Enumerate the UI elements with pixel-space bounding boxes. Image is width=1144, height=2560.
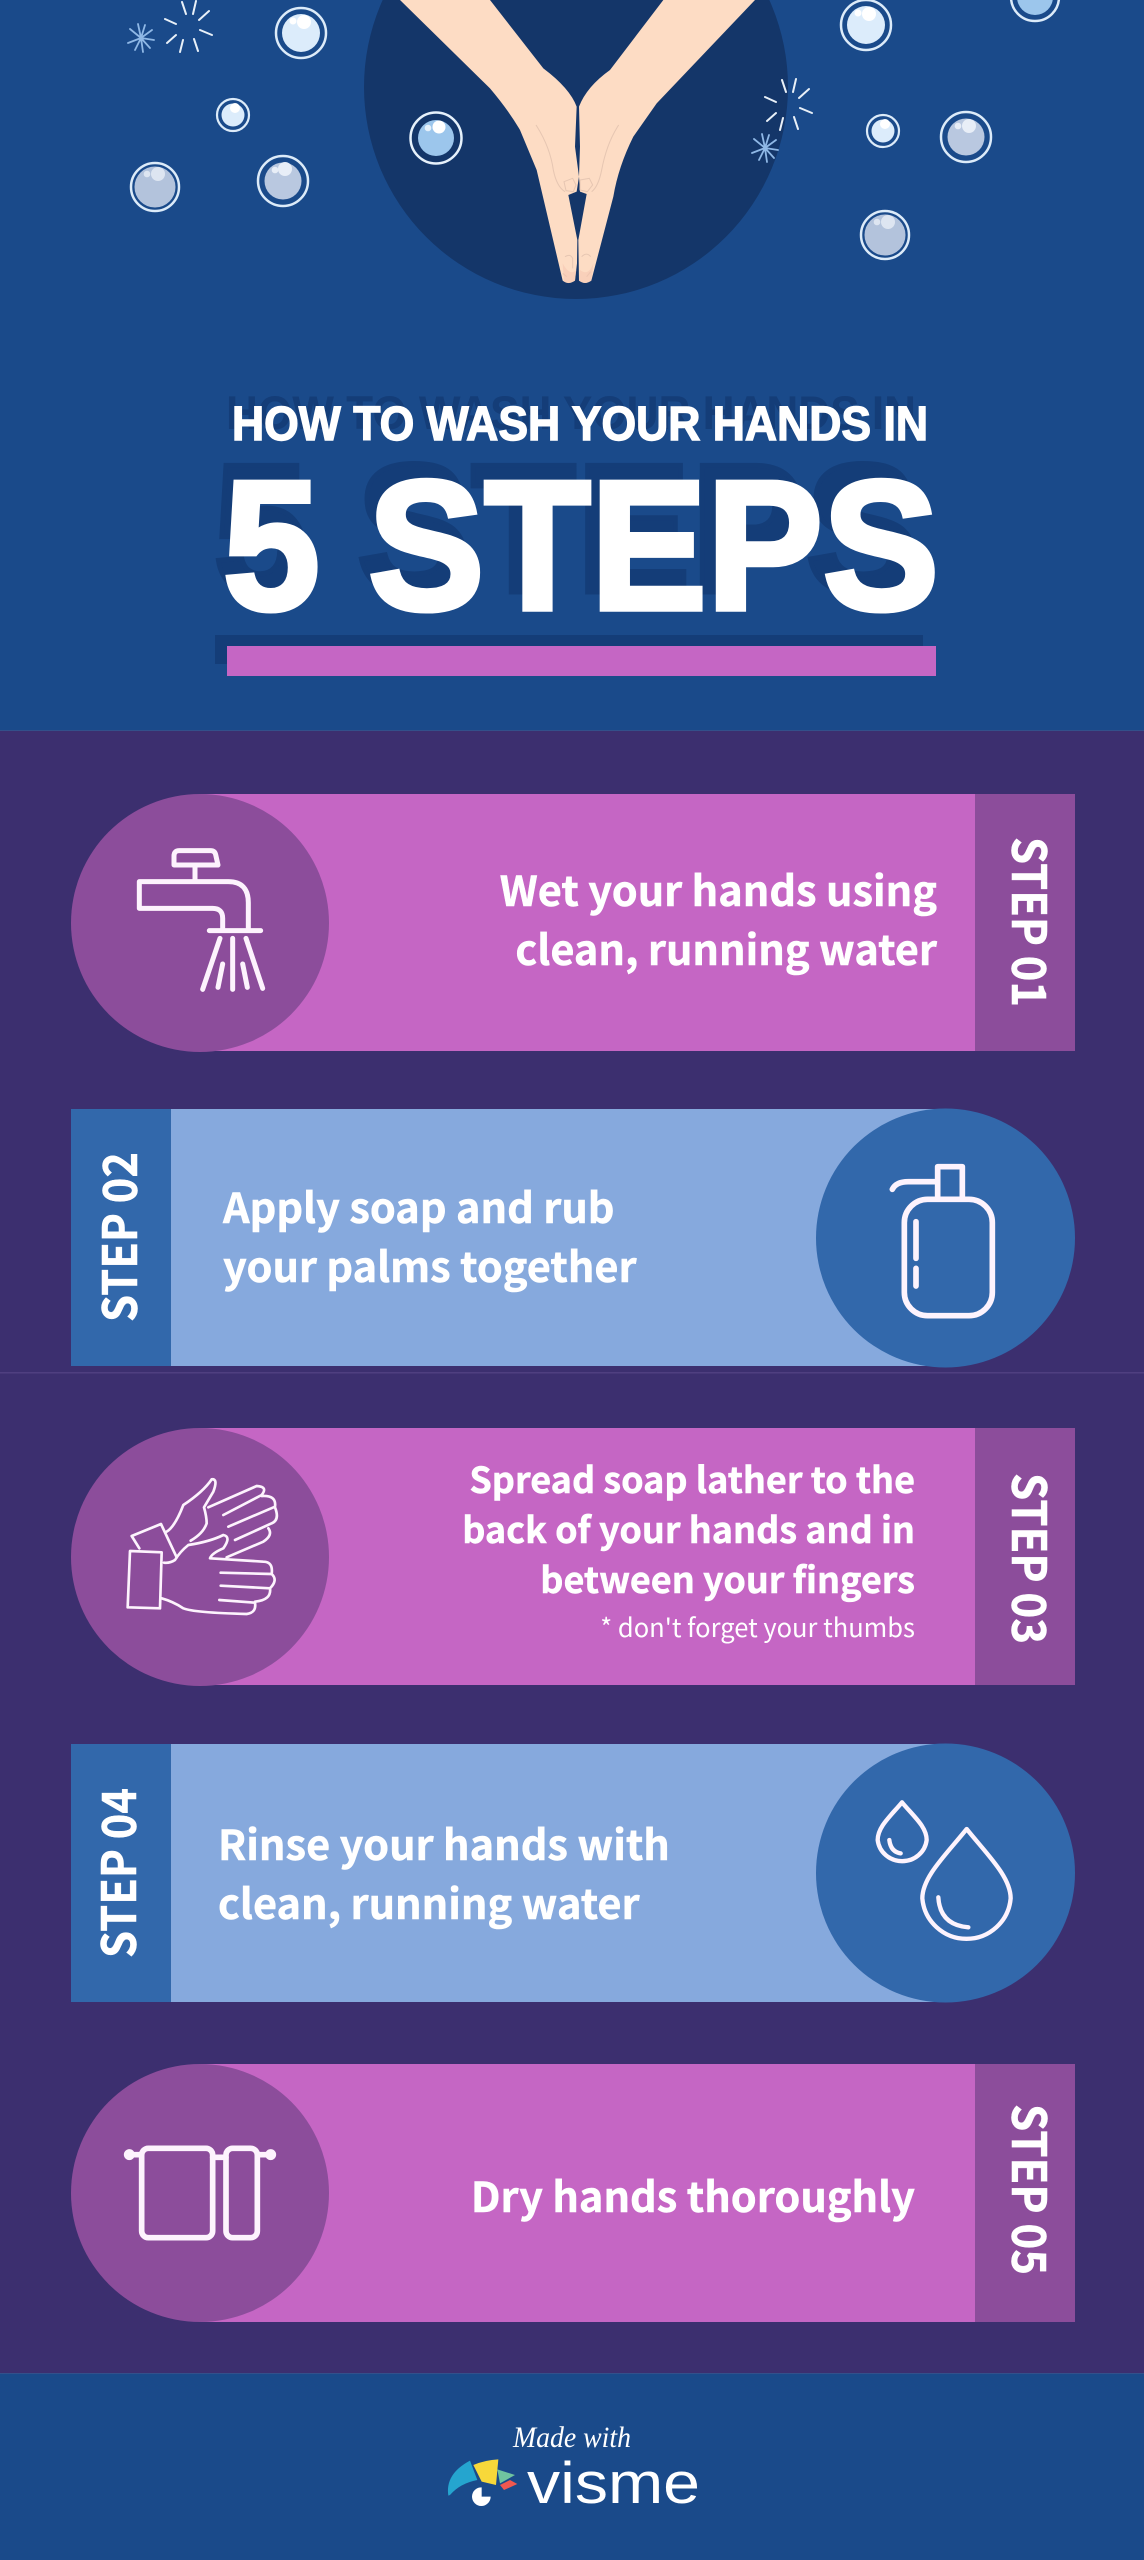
step 5: [71, 2064, 1075, 2322]
logo wordmark: visme: [527, 2451, 700, 2516]
icon: hands: [128, 1479, 277, 1614]
step 1 text: clean, running water: [515, 917, 938, 977]
step 5 text: Dry hands thoroughly: [471, 2164, 915, 2224]
step 2 text: Apply soap and rub: [222, 1175, 615, 1235]
step 4 label: STEP 04: [81, 1788, 150, 1958]
step 3 label: STEP 03: [998, 1473, 1067, 1644]
step 3 text: between your fingers: [540, 1552, 915, 1604]
made with caption: Made with: [512, 2421, 631, 2454]
step 4 text: clean, running water: [218, 1871, 641, 1931]
step 4: [71, 1744, 1075, 2002]
step 1 label: STEP 01: [998, 837, 1067, 1007]
step 1 text: Wet your hands using: [500, 858, 937, 918]
title underline: [227, 646, 936, 676]
title line 1: HOW TO WASH YOUR HANDS IN: [232, 398, 928, 451]
step 3 text: back of your hands and in: [462, 1502, 915, 1554]
step 4 text: Rinse your hands with: [218, 1812, 670, 1872]
dark circle behind hands: [364, 0, 788, 299]
step 2 text: your palms together: [223, 1234, 638, 1294]
steps panel background: [0, 730, 1144, 2373]
step 3 note: * don't forget your thumbs: [600, 1608, 915, 1645]
step 5 label: STEP 05: [998, 2104, 1067, 2275]
title: [213, 386, 939, 676]
step 3: [71, 1428, 1075, 1686]
sparkles: [128, 1, 812, 162]
step 2: [71, 1108, 1075, 1368]
soap bubbles: [131, 0, 1059, 259]
step 2 label: STEP 02: [82, 1152, 151, 1322]
header panel: [0, 0, 1144, 730]
footer: [0, 2373, 1144, 2560]
step 3 text: Spread soap lather to the: [469, 1452, 915, 1504]
icon: faucet: [139, 851, 263, 989]
title line 2: 5 STEPS: [223, 442, 939, 648]
icon: soap bottle: [892, 1167, 992, 1316]
icon: towels: [127, 2148, 273, 2238]
title shadow: 5 STEPS: [213, 425, 920, 631]
illustration: hands pressed together: [400, 0, 755, 283]
title shadow: HOW TO WASH YOUR HANDS IN: [226, 386, 916, 439]
icon: water drops: [878, 1802, 1011, 1939]
logo mark: [448, 2459, 517, 2506]
step 1: [71, 794, 1075, 1052]
